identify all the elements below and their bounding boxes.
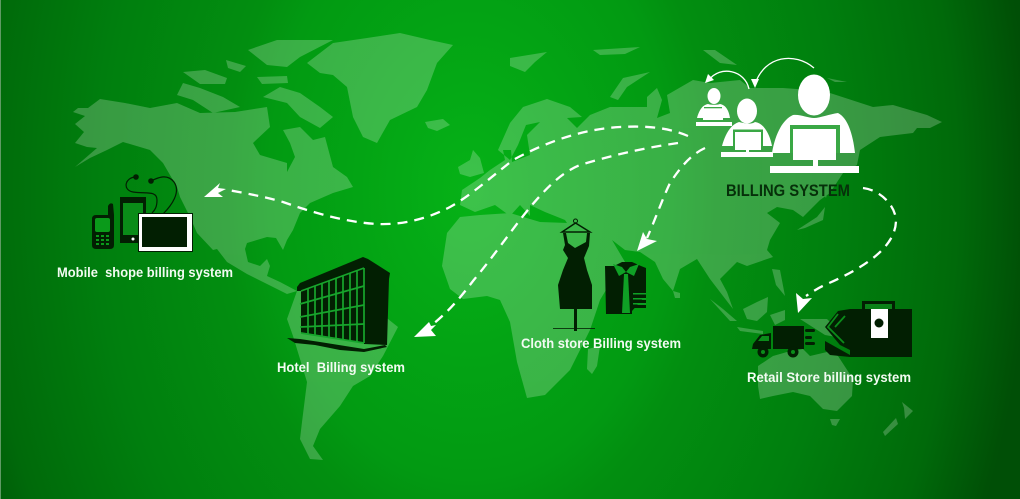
greenland xyxy=(307,33,453,143)
label: cloth store: Cloth store Billing system xyxy=(521,336,681,351)
new zealand xyxy=(883,402,913,436)
icon: hotel building xyxy=(287,257,390,352)
money xyxy=(825,309,850,357)
arctic islands xyxy=(177,40,333,128)
south america xyxy=(287,285,398,460)
route: to retail store xyxy=(796,188,896,313)
arrow: large to medium user xyxy=(751,58,814,88)
tablet xyxy=(138,213,193,252)
northern russian islands xyxy=(510,47,847,100)
icon: mobile devices xyxy=(92,174,193,252)
icon: dress on mannequin xyxy=(553,219,595,331)
icon: shirt xyxy=(605,262,646,314)
route: to hotel xyxy=(414,143,678,337)
candybar phone xyxy=(92,203,114,249)
south east asia xyxy=(673,269,847,339)
label: hotel: Hotel Billing system xyxy=(277,360,405,375)
japan xyxy=(797,173,830,230)
north america xyxy=(73,99,353,294)
earphones xyxy=(126,174,176,214)
route: to cloth store xyxy=(637,148,705,251)
arrow: medium to small user xyxy=(705,71,749,89)
africa xyxy=(442,213,618,398)
user small xyxy=(696,88,732,126)
australia xyxy=(758,349,853,426)
heading: billing system: BILLING SYSTEM xyxy=(726,181,850,200)
british isles xyxy=(458,150,484,177)
label: mobile shop: Mobile shope billing system xyxy=(57,265,233,280)
smartphone xyxy=(120,197,146,243)
label: retail store: Retail Store billing system xyxy=(747,370,911,385)
user large xyxy=(770,74,859,173)
icon: billing users xyxy=(696,58,859,173)
user medium xyxy=(721,98,773,157)
route: to mobile shop xyxy=(204,127,688,224)
iceland xyxy=(425,119,450,131)
world map xyxy=(73,33,942,460)
madagascar xyxy=(587,346,600,374)
eurasia xyxy=(460,80,942,309)
icon: briefcase with money xyxy=(825,301,912,357)
icon: delivery truck xyxy=(752,326,815,358)
